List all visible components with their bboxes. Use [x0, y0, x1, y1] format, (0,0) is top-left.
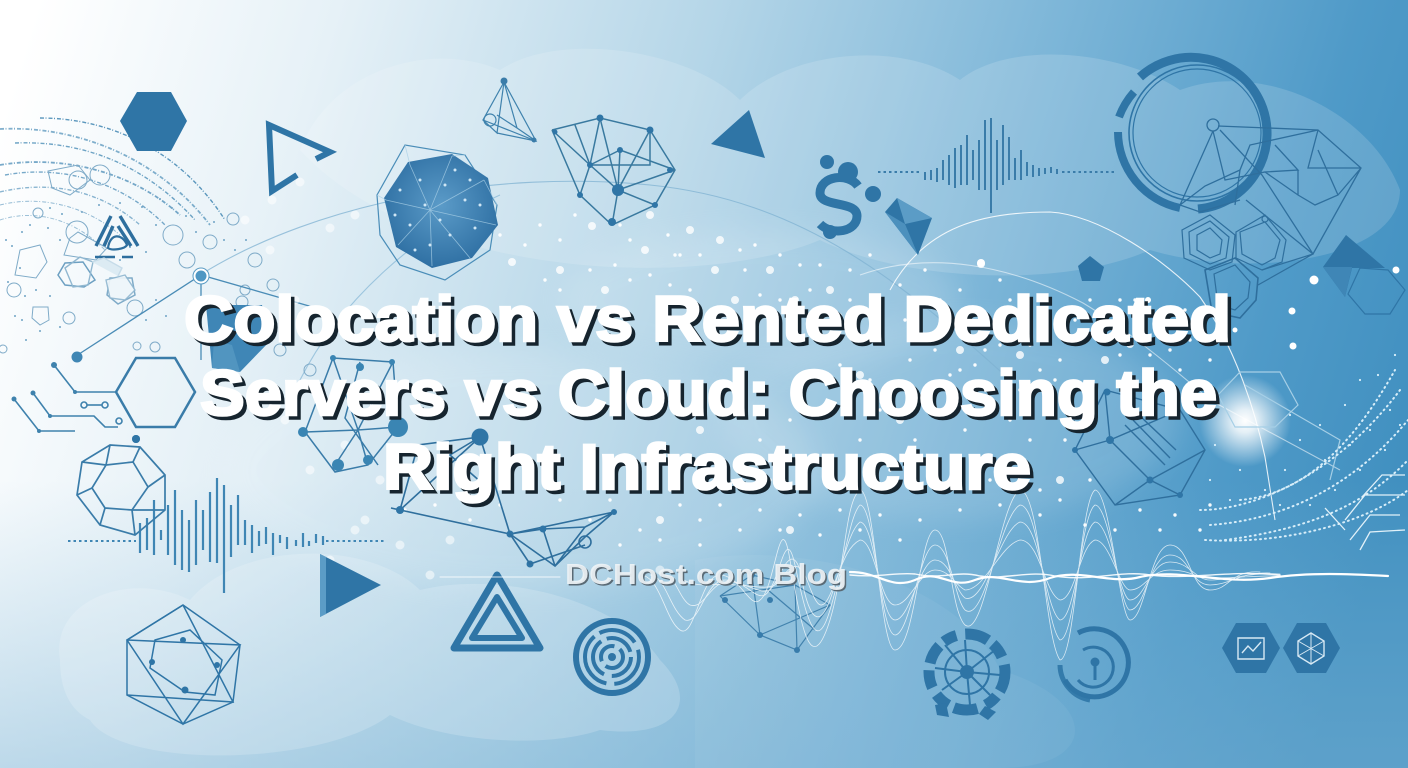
icon: triangle emblem — [95, 216, 138, 257]
triangle outline — [269, 125, 330, 191]
ring gauge — [1118, 57, 1267, 209]
particles: central swarm large — [512, 215, 1130, 530]
hexagons: pale pair — [65, 257, 135, 300]
polyhedron: small wire top — [483, 78, 536, 142]
polyhedron: cube lower left — [127, 605, 240, 724]
gear emblem — [929, 634, 1005, 720]
particles: left cluster — [6, 199, 246, 340]
polyhedron: centre left behind title — [298, 355, 408, 472]
polyhedron: centre network — [391, 428, 617, 568]
hexagon: pale near glow — [1218, 372, 1340, 480]
glow star — [1199, 375, 1291, 467]
hexagon outline — [116, 358, 195, 427]
particles: central swarm small — [405, 215, 1210, 545]
polyhedron: wire large right — [1180, 119, 1361, 254]
play triangle — [320, 554, 381, 617]
hexagon chain: right — [1182, 215, 1313, 318]
data arcs: left particle ring — [0, 118, 225, 250]
small hexagon blob — [1078, 256, 1104, 281]
polyhedron: wire globe — [552, 114, 675, 226]
particles: faint large left — [245, 182, 660, 575]
title: Colocation vs Rented Dedicated — [188, 286, 1234, 358]
title: Servers vs Cloud: Choosing the — [204, 360, 1220, 432]
particle stream: right — [1200, 355, 1408, 541]
triangle: solid — [711, 110, 765, 158]
circuit traces — [12, 362, 140, 443]
polyhedron: dark sphere — [377, 145, 498, 280]
waveform: upper right — [925, 118, 1057, 213]
sine wave bundle — [440, 490, 1388, 660]
rounded triangle — [454, 575, 540, 648]
title: Right Infrastructure — [383, 431, 1031, 503]
polyhedron: behind line three right — [1072, 388, 1205, 505]
hexagon: solid blue — [120, 92, 187, 151]
logo: linked circles — [820, 155, 881, 239]
hexagon bubbles: left cluster — [0, 165, 316, 376]
network arc lines — [200, 181, 1340, 520]
circular power dial — [1060, 629, 1128, 700]
waveform: lower left — [140, 478, 323, 593]
gem: blue hexagonal — [206, 305, 271, 372]
subtitle: blog name: DCHost.com Blog — [565, 559, 847, 591]
circuit traces: right — [1325, 475, 1405, 550]
subtitle: blog name: DCHost.com Blog — [566, 560, 848, 592]
title: Servers vs Cloud: Choosing the — [200, 357, 1217, 429]
title: Colocation vs Rented Dedicated — [184, 283, 1231, 355]
polyhedron: octagon lower left — [77, 435, 165, 535]
polyhedron: lower centre faint — [720, 572, 830, 653]
title: Right Infrastructure — [386, 434, 1034, 506]
gem: folded — [885, 198, 932, 255]
circular maze — [576, 621, 648, 693]
hex icons — [1222, 623, 1340, 673]
gem: right with hexagon — [1323, 235, 1405, 314]
network node — [72, 268, 330, 362]
title — [184, 283, 1234, 506]
bright glints: right side — [977, 259, 1400, 350]
